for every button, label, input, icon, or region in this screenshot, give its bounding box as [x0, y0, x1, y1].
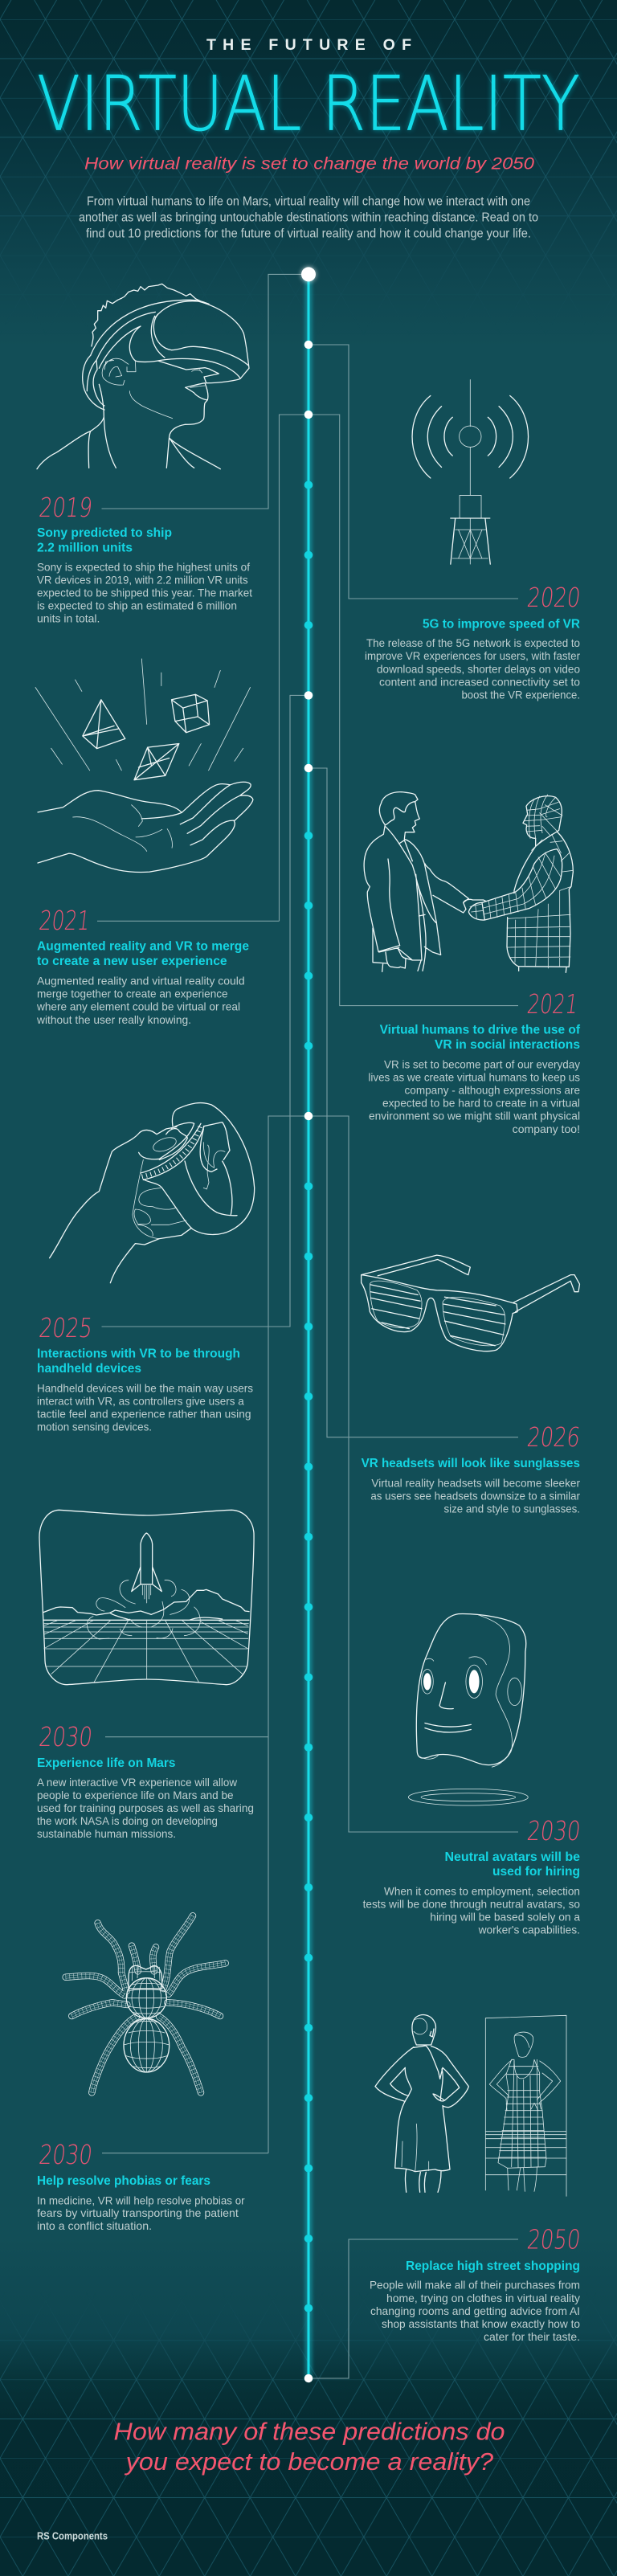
panel: 2030 phobias [37, 1916, 245, 2232]
body text: without the user really knowing. [36, 1013, 191, 1026]
body text: worker's capabilities. [478, 1924, 580, 1936]
heading: Replace high street shopping [406, 2259, 580, 2273]
body text: environment so we might still want physical [369, 1110, 580, 1122]
body text [37, 1776, 254, 1840]
body text [368, 1057, 580, 1135]
panel: 2030 Mars [37, 1510, 254, 1840]
body text [37, 1382, 253, 1433]
body text: as users see headsets downsize to a similar [370, 1489, 580, 1502]
icon: wireframe spider [66, 1916, 226, 2092]
year: 2020 [525, 582, 582, 613]
body text [370, 2279, 580, 2343]
heading: VR headsets will look like sunglasses [362, 1457, 580, 1470]
closing question [114, 2418, 505, 2476]
subtitle: How virtual reality is set to change the world by 2050 [84, 154, 534, 174]
heading: Virtual humans to drive the use of [380, 1023, 581, 1037]
body text [370, 1476, 580, 1515]
heading [37, 526, 172, 554]
connector lines [97, 274, 518, 2378]
body text: VR is set to become part of our everyday [384, 1057, 580, 1070]
intro text: another as well as bringing untouchable destinations within reaching distance. Read on to [79, 211, 538, 225]
body text: In medicine, VR will help resolve phobias or [37, 2194, 245, 2206]
closing question: How many of these predictions do [114, 2418, 505, 2446]
body text: A new interactive VR experience will allow [37, 1776, 238, 1789]
panel: 2050 shopping [370, 2015, 582, 2343]
body text: Sony is expected to ship the highest units of [37, 560, 250, 573]
icon: sunglasses [362, 1255, 579, 1351]
heading: Neutral avatars will be [445, 1850, 580, 1864]
top node [300, 267, 317, 282]
heading: VR in social interactions [435, 1038, 580, 1052]
icon: handshake with wireframe human [364, 792, 573, 972]
panel: 2026 sunglasses [362, 1255, 582, 1515]
body text: company too! [513, 1122, 580, 1135]
cyan year markers [304, 480, 313, 2312]
body text: into a conflict situation. [37, 2219, 152, 2232]
year: 2021 [38, 905, 92, 936]
body text: the work NASA is doing on developing [37, 1814, 218, 1827]
panel: 2021 virtual humans [364, 792, 581, 1135]
body text: motion sensing devices. [37, 1421, 152, 1433]
heading: handheld devices [37, 1362, 141, 1376]
body text: VR devices in 2019, with 2.2 million VR units [37, 573, 248, 586]
header [37, 36, 580, 240]
year: 2050 [525, 2224, 582, 2255]
heading: Augmented reality and VR to merge [37, 940, 249, 954]
heading: 2.2 million units [37, 541, 133, 554]
body text: is expected to ship an estimated 6 million [37, 599, 237, 612]
intro text: From virtual humans to life on Mars, virtual reality will change how we interact with one [87, 195, 530, 209]
body text: sustainable human missions. [37, 1827, 176, 1840]
panel: 2030 avatars [363, 1614, 582, 1936]
body text: where any element could be virtual or real [36, 1000, 240, 1013]
body text [36, 975, 245, 1026]
heading: Sony predicted to ship [37, 526, 172, 540]
body text: The release of the 5G network is expected to [366, 636, 580, 649]
body text [365, 636, 580, 701]
icon: floating neutral avatar head [408, 1614, 528, 1805]
body text: changing rooms and getting advice from AI [370, 2304, 580, 2317]
body text: cater for their taste. [484, 2330, 580, 2343]
body text: expected to be hard to create in a virtual [382, 1096, 580, 1109]
body text: hiring will be based solely on a [430, 1911, 580, 1924]
body text: improve VR experiences for users, with faster [365, 649, 580, 662]
body text: People will make all of their purchases from [370, 2279, 580, 2292]
body text [37, 560, 252, 625]
body text: used for training purposes as well as sharing [37, 1801, 254, 1814]
body text: size and style to sunglasses. [443, 1503, 580, 1515]
heading [37, 940, 249, 968]
panel: 2021 augmented reality [35, 659, 253, 1026]
body text: When it comes to employment, selection [384, 1884, 580, 1897]
year: 2030 [38, 1721, 94, 1752]
body text: expected to be shipped this year. The market [37, 587, 252, 599]
body text: interact with VR, as controllers give users a [37, 1395, 244, 1408]
credit: RS Components [37, 2531, 108, 2542]
year: 2026 [525, 1421, 582, 1453]
heading [37, 1347, 240, 1376]
body text [37, 2194, 245, 2232]
body text: home, trying on clothes in virtual reality [386, 2292, 580, 2304]
timeline [300, 267, 317, 2382]
heading: to create a new user experience [37, 955, 227, 968]
body text [363, 1884, 580, 1936]
year: 2021 [525, 988, 580, 1020]
heading [380, 1023, 581, 1052]
body text: shop assistants that know exactly how to [382, 2317, 580, 2330]
icon: VR view of rocket launch on grid [39, 1510, 254, 1685]
body text: Handheld devices will be the main way users [37, 1382, 253, 1395]
closing question: you expect to become a reality? [125, 2447, 494, 2476]
body text: fears by virtually transporting the patient [37, 2206, 239, 2219]
body text: lives as we create virtual humans to keep us [368, 1070, 580, 1083]
panel: 2019 Sony [37, 284, 252, 625]
heading: Interactions with VR to be through [37, 1347, 240, 1361]
body text: boost the VR experience. [461, 689, 580, 701]
body text: content and increased connectivity set to [379, 675, 580, 688]
icon: hand with floating shapes [35, 659, 253, 872]
year: 2030 [525, 1815, 582, 1846]
icon: radio tower [412, 379, 529, 564]
body text: company - although expressions are [405, 1083, 580, 1096]
body text: units in total. [37, 612, 100, 625]
icon: woman trying dress in virtual mirror [375, 2015, 566, 2196]
body text: download speeds, shorter delays on video [377, 662, 580, 675]
body text: Virtual reality headsets will become sleeker [371, 1476, 580, 1489]
body text: tests will be done through neutral avatars, so [363, 1898, 580, 1911]
white connector nodes [304, 341, 313, 2382]
heading: Experience life on Mars [37, 1756, 175, 1770]
intro text [79, 195, 538, 240]
heading: 5G to improve speed of VR [423, 617, 580, 631]
panel: 2025 handheld [37, 1103, 255, 1433]
year: 2025 [38, 1312, 94, 1343]
kicker: the future of: THE FUTURE OF [206, 36, 411, 54]
body text: Augmented reality and virtual reality could [37, 975, 245, 987]
year: 2030 [38, 2139, 94, 2170]
icon: person wearing VR headset [37, 284, 249, 469]
body text: merge together to create an experience [37, 987, 228, 1000]
year: 2019 [38, 492, 94, 523]
heading [445, 1850, 580, 1879]
panel: 2020 5G [365, 379, 582, 701]
icon: hand holding VR controller [50, 1103, 255, 1283]
heading: used for hiring [492, 1865, 580, 1879]
body text: tactile feel and experience rather than using [37, 1408, 251, 1421]
body text: people to experience life on Mars and be [37, 1789, 234, 1801]
intro text: find out 10 predictions for the future of virtual reality and how it could change your life. [86, 227, 531, 240]
heading: Help resolve phobias or fears [37, 2174, 210, 2188]
